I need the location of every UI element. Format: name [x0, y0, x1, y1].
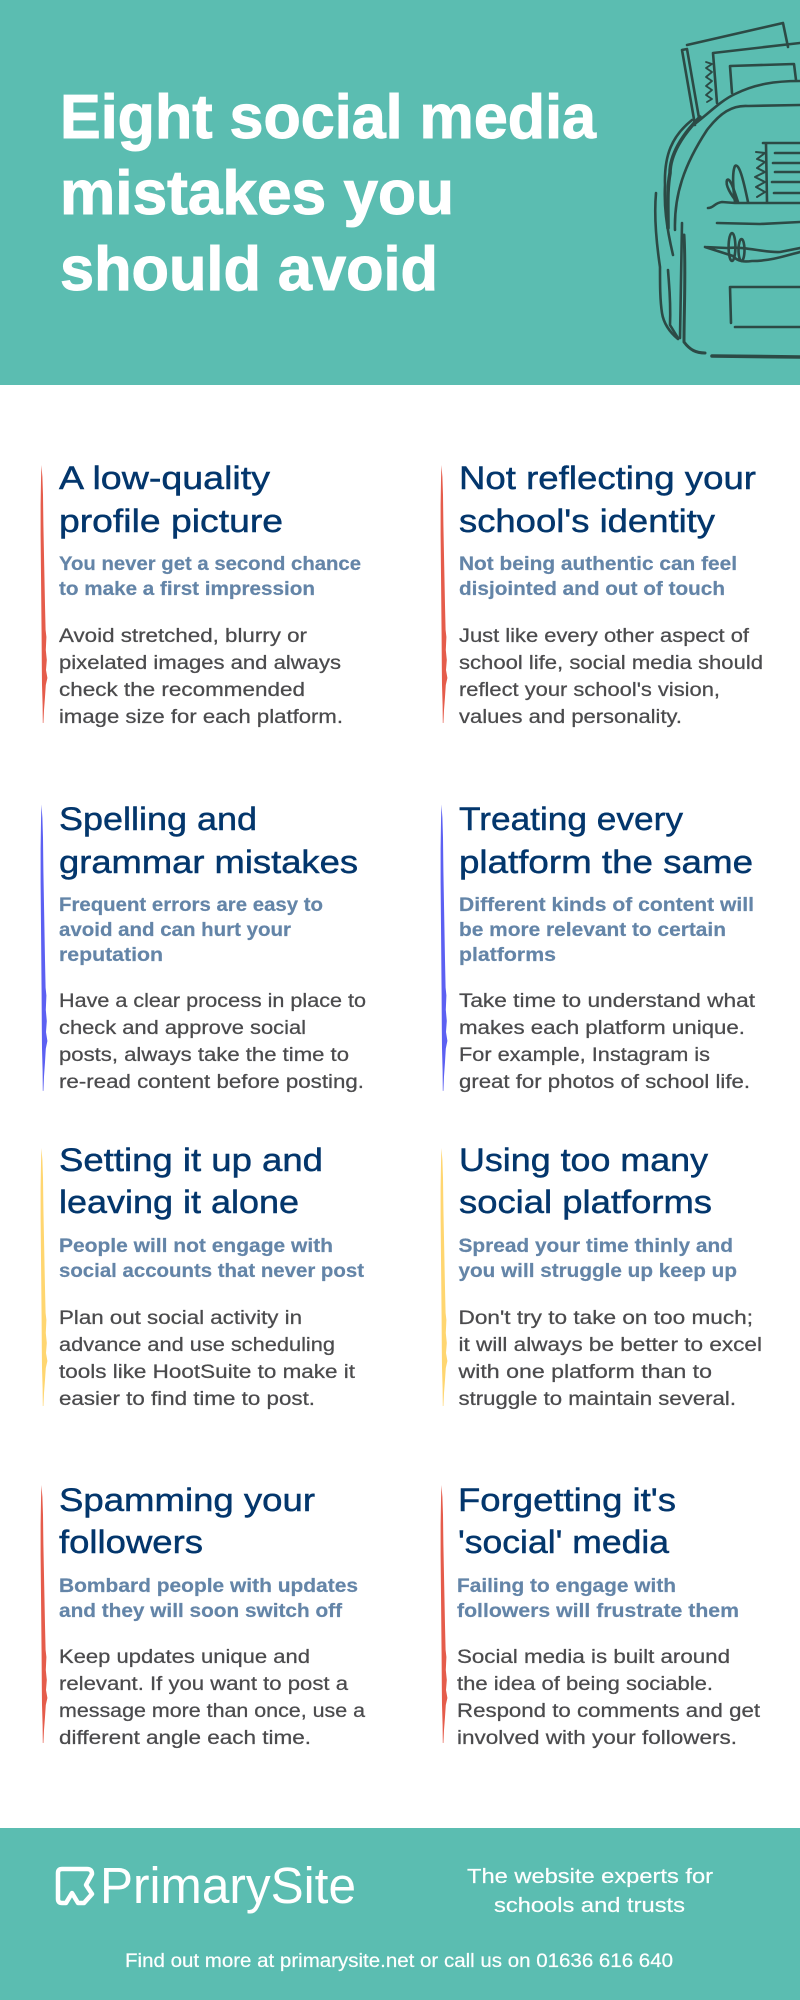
heading: 'social' media [458, 1524, 669, 1560]
body text [457, 1308, 762, 1410]
heading: grammar mistakes [59, 844, 358, 880]
subheading: reputation [59, 945, 163, 966]
panel: spelling and grammar mistakes [41, 801, 366, 1093]
body text: Don't try to take on too much; [458, 1308, 753, 1329]
body text: different angle each time. [59, 1728, 311, 1749]
subheading [59, 554, 361, 600]
heading: Not reflecting your [459, 460, 756, 496]
body text: makes each platform unique. [459, 1018, 745, 1039]
body text: great for photos of school life. [459, 1072, 750, 1093]
panel: setting it up and leaving it alone [41, 1142, 365, 1410]
tagline [467, 1865, 713, 1917]
heading: school's identity [459, 503, 715, 539]
heading [459, 1142, 712, 1220]
body text: pixelated images and always [59, 653, 341, 674]
heading: social platforms [459, 1184, 712, 1220]
logo: PrimarySite [58, 1857, 356, 1914]
footer band [0, 1828, 800, 2000]
body text: school life, social media should [459, 653, 763, 674]
body text [59, 1308, 356, 1410]
body text: the idea of being sociable. [457, 1674, 713, 1695]
body text: Just like every other aspect of [459, 626, 750, 647]
subheading [59, 1236, 365, 1282]
heading: Forgetting it's [458, 1482, 676, 1518]
heading [458, 1482, 676, 1560]
body text: message more than once, use a [59, 1701, 365, 1722]
subheading: Frequent errors are easy to [59, 895, 323, 916]
body text: easier to find time to post. [59, 1389, 315, 1410]
panel: treating every platform the same [441, 801, 756, 1093]
heading [59, 460, 283, 539]
accent bar [441, 1485, 447, 1743]
panel: low-quality profile picture [41, 460, 361, 728]
body text: struggle to maintain several. [458, 1389, 736, 1410]
body text: re-read content before posting. [59, 1072, 364, 1093]
subheading: avoid and can hurt your [59, 920, 292, 941]
heading [59, 1142, 323, 1220]
heading [59, 801, 358, 880]
body text [59, 991, 366, 1093]
title: Eight social media [60, 83, 596, 152]
subheading: Failing to engage with [457, 1576, 676, 1597]
heading [59, 1482, 315, 1560]
body text [459, 626, 763, 728]
accent bar [41, 1148, 47, 1406]
subheading: be more relevant to certain [459, 920, 726, 941]
accent bar [441, 465, 447, 723]
body text: relevant. If you want to post a [59, 1674, 348, 1695]
body text [459, 991, 756, 1093]
body text: Plan out social activity in [59, 1308, 302, 1329]
panel: using too many social platforms [441, 1142, 762, 1410]
heading: leaving it alone [59, 1184, 299, 1220]
accent bar [41, 805, 47, 1091]
body text: with one platform than to [457, 1362, 712, 1383]
panel: spamming your followers [41, 1482, 365, 1749]
title: should avoid [60, 235, 438, 304]
body text [59, 1647, 365, 1749]
header band [0, 0, 800, 385]
body text: check the recommended [59, 680, 305, 701]
body text: involved with your followers. [457, 1728, 737, 1749]
tagline: schools and trusts [494, 1894, 685, 1917]
heading: followers [59, 1524, 203, 1560]
subheading: to make a first impression [59, 579, 315, 600]
heading [459, 801, 753, 880]
heading: Spamming your [59, 1482, 315, 1518]
subheading [459, 895, 754, 966]
body text: Respond to comments and get [457, 1701, 761, 1722]
body text: it will always be better to excel [458, 1335, 762, 1356]
body text: Social media is built around [457, 1647, 730, 1668]
subheading: Spread your time thinly and [458, 1236, 733, 1257]
body text: Keep updates unique and [59, 1647, 310, 1668]
subheading: followers will frustrate them [457, 1601, 739, 1622]
subheading: Different kinds of content will [459, 895, 754, 916]
subheading: People will not engage with [59, 1236, 333, 1257]
body text: Have a clear process in place to [59, 991, 366, 1012]
heading: A low-quality [59, 460, 270, 496]
subheading [459, 554, 737, 600]
subheading: disjointed and out of touch [459, 579, 725, 600]
tagline: The website experts for [467, 1865, 713, 1888]
body text: reflect your school's vision, [459, 680, 720, 701]
contact line: Find out more at primarysite.net or call us on 01636 616 640 [125, 1951, 673, 1972]
icon: backpack sketch [655, 23, 800, 357]
subheading: you will struggle up keep up [458, 1261, 737, 1282]
accent bar [441, 804, 447, 1091]
body text: tools like HootSuite to make it [59, 1362, 356, 1383]
heading: Spelling and [59, 801, 257, 837]
body text: check and approve social [59, 1018, 306, 1039]
logo wordmark: PrimarySite [100, 1857, 356, 1914]
body text [59, 626, 343, 728]
subheading [59, 1576, 358, 1622]
subheading [457, 1576, 739, 1622]
body text [457, 1647, 761, 1749]
body text: advance and use scheduling [59, 1335, 335, 1356]
accent bar [441, 1148, 447, 1406]
body text: posts, always take the time to [59, 1045, 349, 1066]
body text: Avoid stretched, blurry or [59, 626, 308, 647]
subheading [59, 895, 323, 966]
panel: forgetting it's social media [441, 1482, 761, 1749]
title: mistakes you [60, 159, 454, 228]
subheading: You never get a second chance [59, 554, 361, 575]
heading: profile picture [59, 503, 283, 539]
title [60, 83, 596, 304]
accent bar [41, 1485, 47, 1743]
body text: image size for each platform. [59, 707, 343, 728]
subheading: and they will soon switch off [59, 1601, 343, 1622]
heading: Treating every [459, 801, 683, 837]
heading [459, 460, 756, 539]
panel: not reflecting your school's identity [441, 460, 763, 728]
accent bar [41, 465, 47, 723]
subheading: platforms [459, 945, 556, 966]
body text: For example, Instagram is [459, 1045, 710, 1066]
subheading: Not being authentic can feel [459, 554, 737, 575]
subheading [458, 1236, 737, 1282]
heading: Using too many [459, 1142, 708, 1178]
heading: platform the same [459, 844, 753, 880]
icon: logo mark [58, 1869, 92, 1903]
heading: Setting it up and [59, 1142, 323, 1178]
body text: Take time to understand what [459, 991, 756, 1012]
subheading: Bombard people with updates [59, 1576, 358, 1597]
body text: values and personality. [459, 707, 682, 728]
subheading: social accounts that never post [59, 1261, 365, 1282]
